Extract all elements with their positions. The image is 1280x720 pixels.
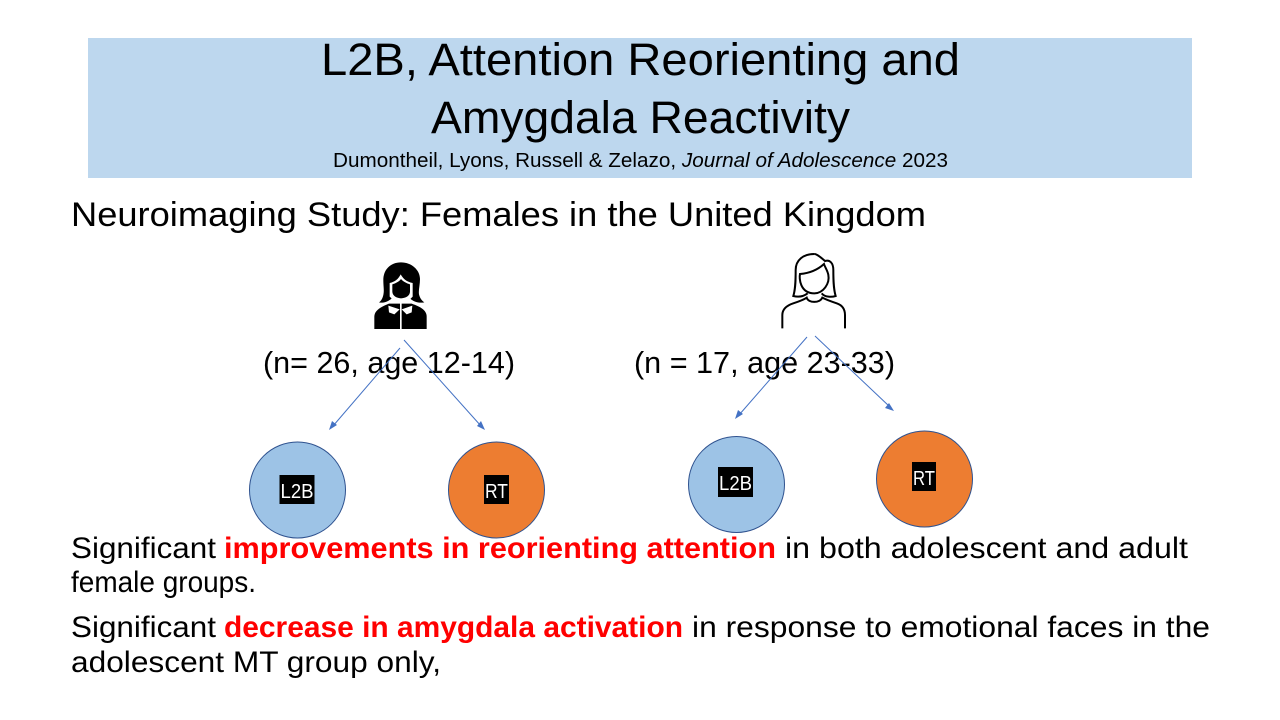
node: adult L2B: L2B [719, 473, 752, 495]
node: adult RT [876, 431, 972, 527]
node: adult RT: RT [913, 468, 935, 490]
finding: reorienting attention: Significant [71, 532, 217, 565]
node: adult L2B [688, 436, 784, 532]
title: Amygdala Reactivity [431, 92, 851, 143]
finding: amygdala activation: adolescent MT group only, [71, 646, 441, 679]
group label: adolescents: (n= 26, age 12-14) [263, 345, 515, 380]
icon: adult woman [782, 254, 845, 328]
arrows: adolescents [329, 340, 485, 430]
icon: adolescent girl [374, 262, 427, 329]
finding: reorienting attention: female groups. [71, 566, 256, 599]
title: L2B, Attention Reorienting and [321, 34, 960, 85]
finding: amygdala activation: Significant [71, 611, 217, 644]
title [321, 34, 960, 143]
node: adolescent L2B: L2B [280, 481, 314, 503]
highlight: improvements: improvements in reorienting attention [224, 532, 776, 565]
highlight: decrease: decrease in amygdala activation [224, 611, 683, 644]
finding: reorienting attention [71, 532, 1189, 599]
node: adolescent RT: RT [485, 481, 508, 503]
subheading: Neuroimaging Study: Females in the United Kingdom [71, 196, 926, 234]
title banner [88, 34, 1192, 178]
citation: Dumontheil, Lyons, Russell & Zelazo, Journal of Adolescence 2023 [333, 150, 948, 172]
finding: amygdala activation [71, 611, 1210, 679]
group label: adults: (n = 17, age 23-33) [634, 345, 895, 380]
finding: amygdala activation: in response to emotional faces in the [692, 611, 1210, 644]
arrows: adults [735, 336, 894, 419]
node: adolescent L2B [250, 442, 346, 538]
finding: reorienting attention: in both adolescent and adult [785, 532, 1189, 565]
node: adolescent RT [448, 442, 544, 538]
